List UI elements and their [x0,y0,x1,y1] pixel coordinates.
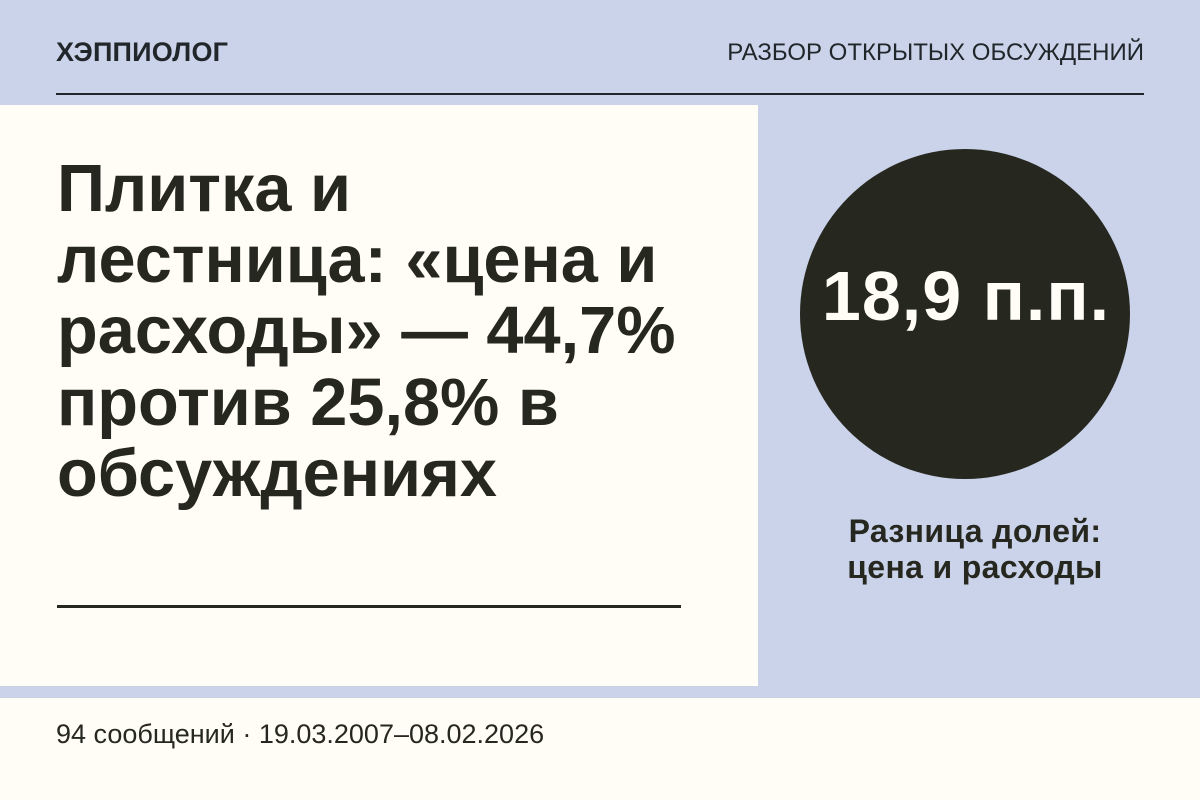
headline rule [57,605,681,608]
figure caption: Разница долей: [849,513,1101,549]
headline text: против 25,8% в [57,366,559,440]
figure caption [847,513,1103,585]
panel: headline [0,105,758,686]
headline text [57,152,676,511]
headline text: расходы» — 44,7% [57,294,676,368]
figure caption: цена и расходы [847,549,1103,585]
figure value: 18,9 п.п. [822,257,1110,335]
headline text: лестница: «цена и [57,223,657,297]
header rule [56,93,1144,95]
circle: key figure [800,149,1130,479]
header subtitle: РАЗБОР ОТКРЫТЫХ ОБСУЖДЕНИЙ [727,39,1144,66]
headline text: обсуждениях [57,437,497,511]
header brand: ХЭППИОЛОГ [56,37,228,67]
footer text: 94 сообщений · 19.03.2007–08.02.2026 [56,719,544,749]
headline text: Плитка и [57,152,351,226]
footer band [0,698,1200,800]
